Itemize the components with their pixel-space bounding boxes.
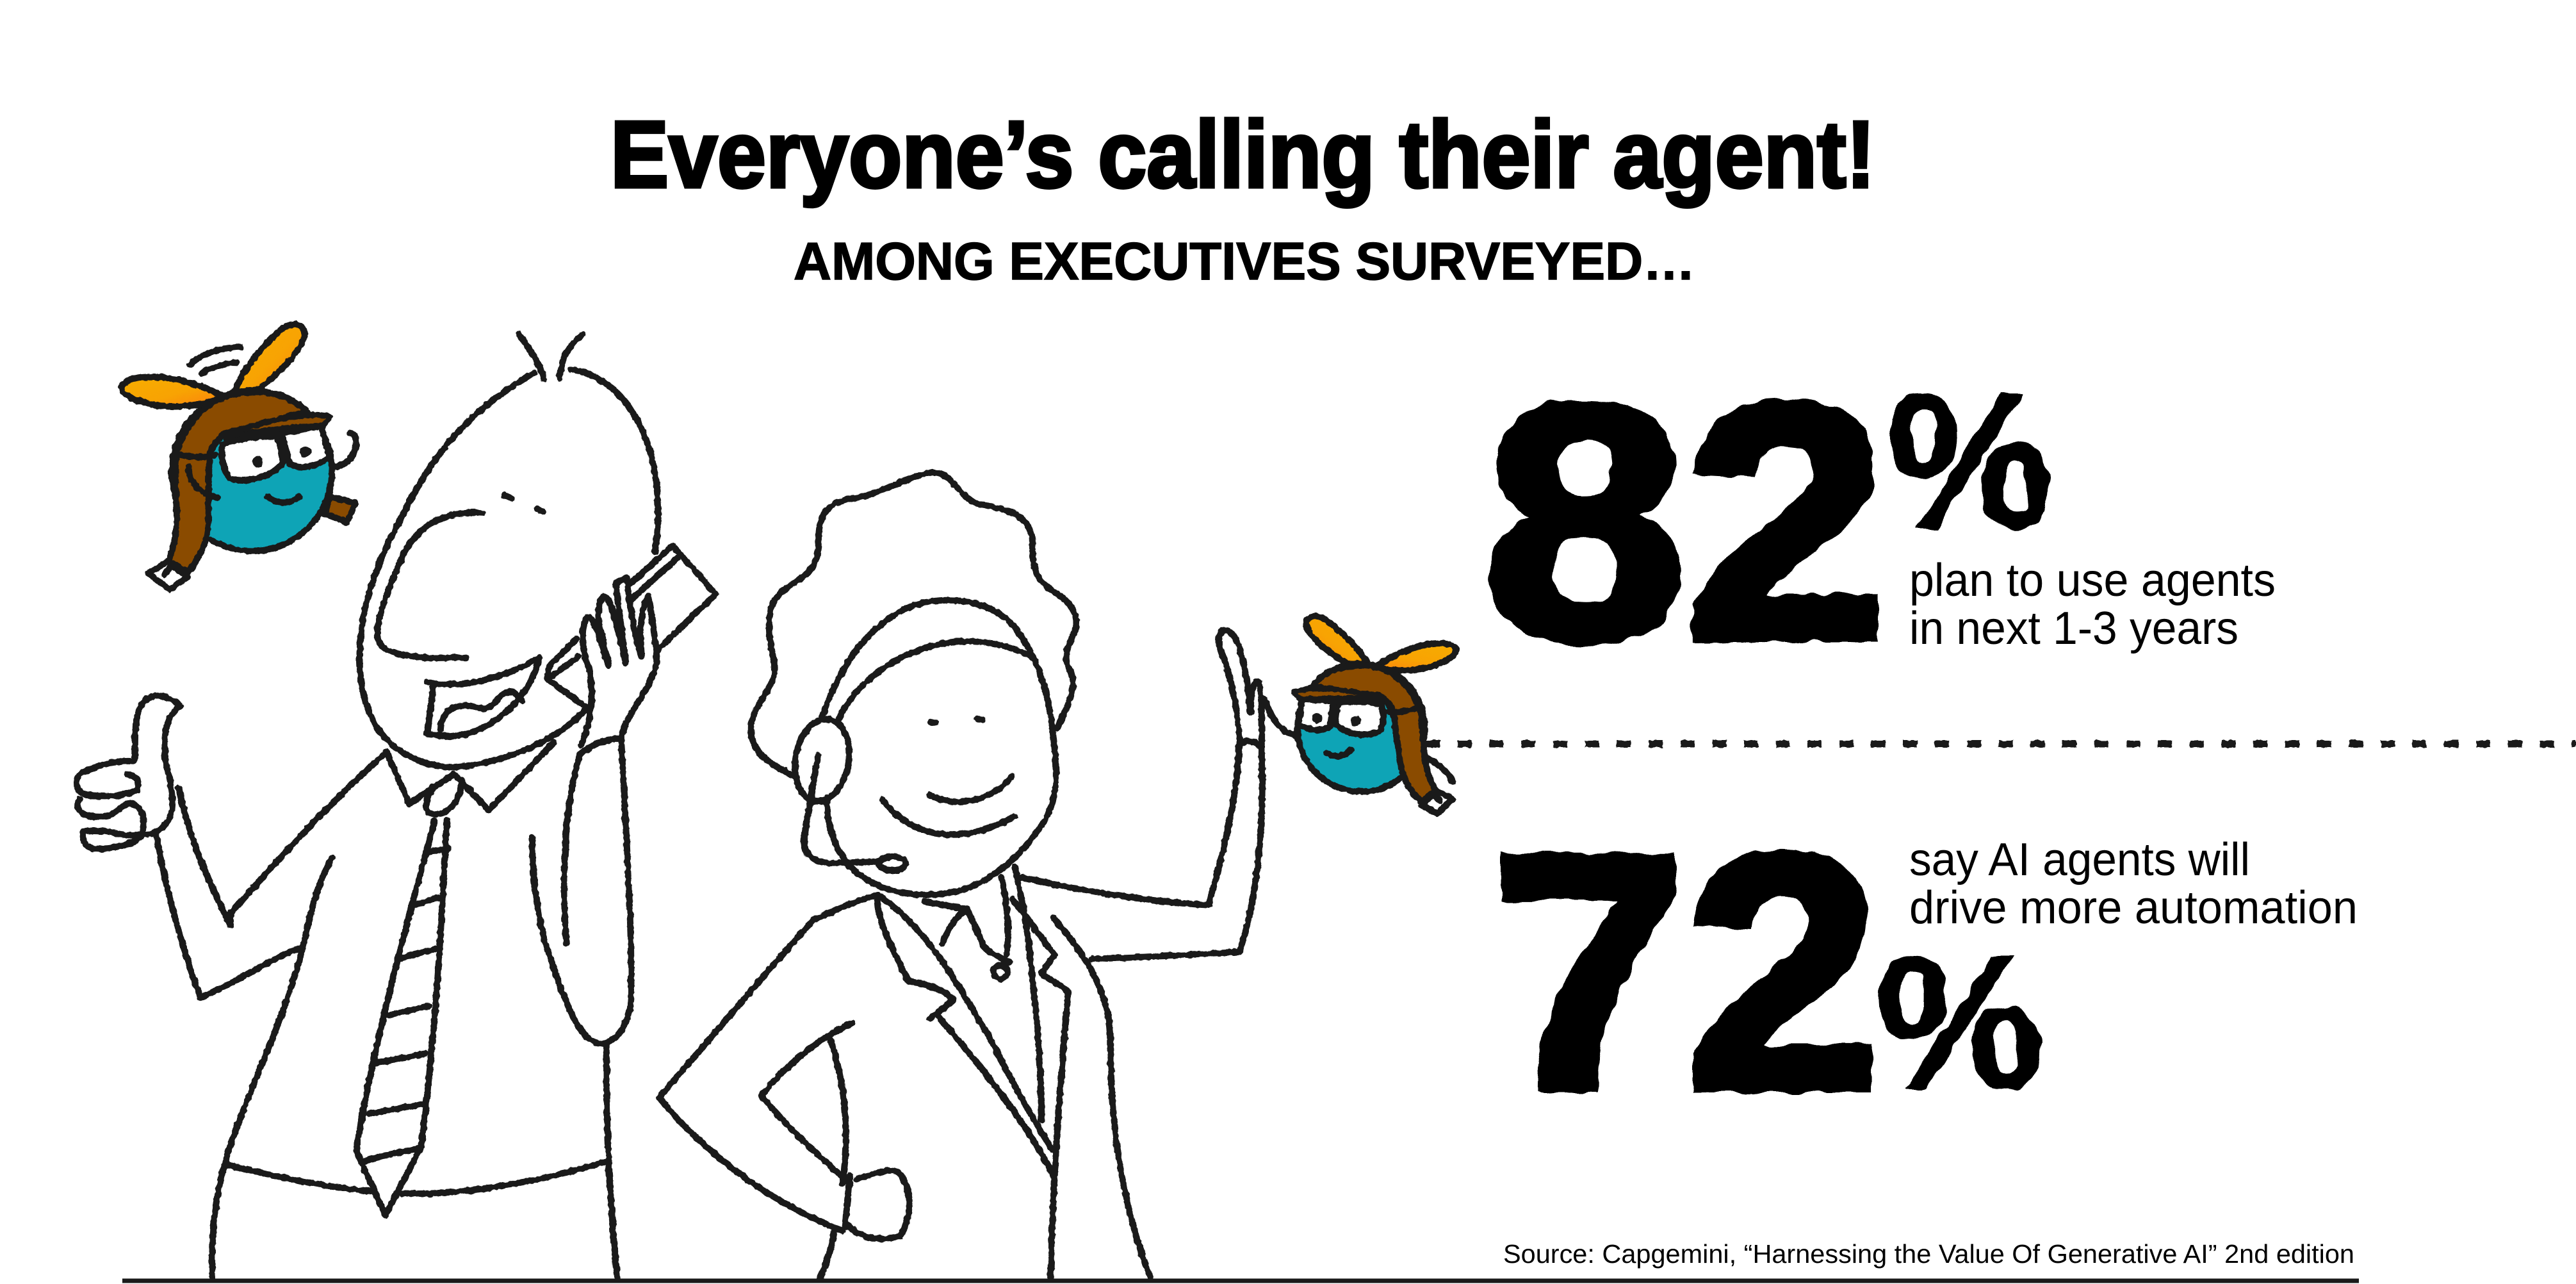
source note: Source: Capgemini, “Harnessing the Value Of Generative AI” 2nd edition bbox=[1503, 1239, 2354, 1269]
statistic: 82 percent bbox=[1485, 336, 2053, 708]
illustration: man on the phone with thumbs up bbox=[76, 334, 715, 1279]
caption: 82 percent: plan to use agents bbox=[1909, 555, 2276, 606]
illustration: woman with headset raising a hand bbox=[659, 472, 1453, 1279]
statistic: 82 percent: % bbox=[1886, 353, 2053, 568]
icon: flying AI agent mascot, top left bbox=[122, 324, 356, 589]
ground line bbox=[122, 1279, 2359, 1283]
icon: flying AI agent mascot, centre bbox=[1284, 600, 1475, 829]
caption: 82 percent bbox=[1909, 555, 2276, 654]
caption: 72 percent bbox=[1909, 834, 2358, 934]
caption: 72 percent: say AI agents will bbox=[1909, 834, 2250, 885]
statistic: 82 percent: 82 bbox=[1485, 336, 1887, 708]
statistic: 72 percent: 72 bbox=[1492, 786, 1880, 1158]
dashed flight path divider bbox=[1426, 741, 2576, 747]
statistic: 72 percent bbox=[1492, 786, 2043, 1158]
caption: 82 percent: in next 1-3 years bbox=[1909, 603, 2238, 654]
caption: 72 percent: drive more automation bbox=[1909, 882, 2358, 934]
subtitle: AMONG EXECUTIVES SURVEYED… bbox=[794, 231, 1695, 291]
title: Everyone’s calling their agent! bbox=[610, 102, 1875, 208]
statistic: 72 percent: % bbox=[1875, 917, 2043, 1128]
